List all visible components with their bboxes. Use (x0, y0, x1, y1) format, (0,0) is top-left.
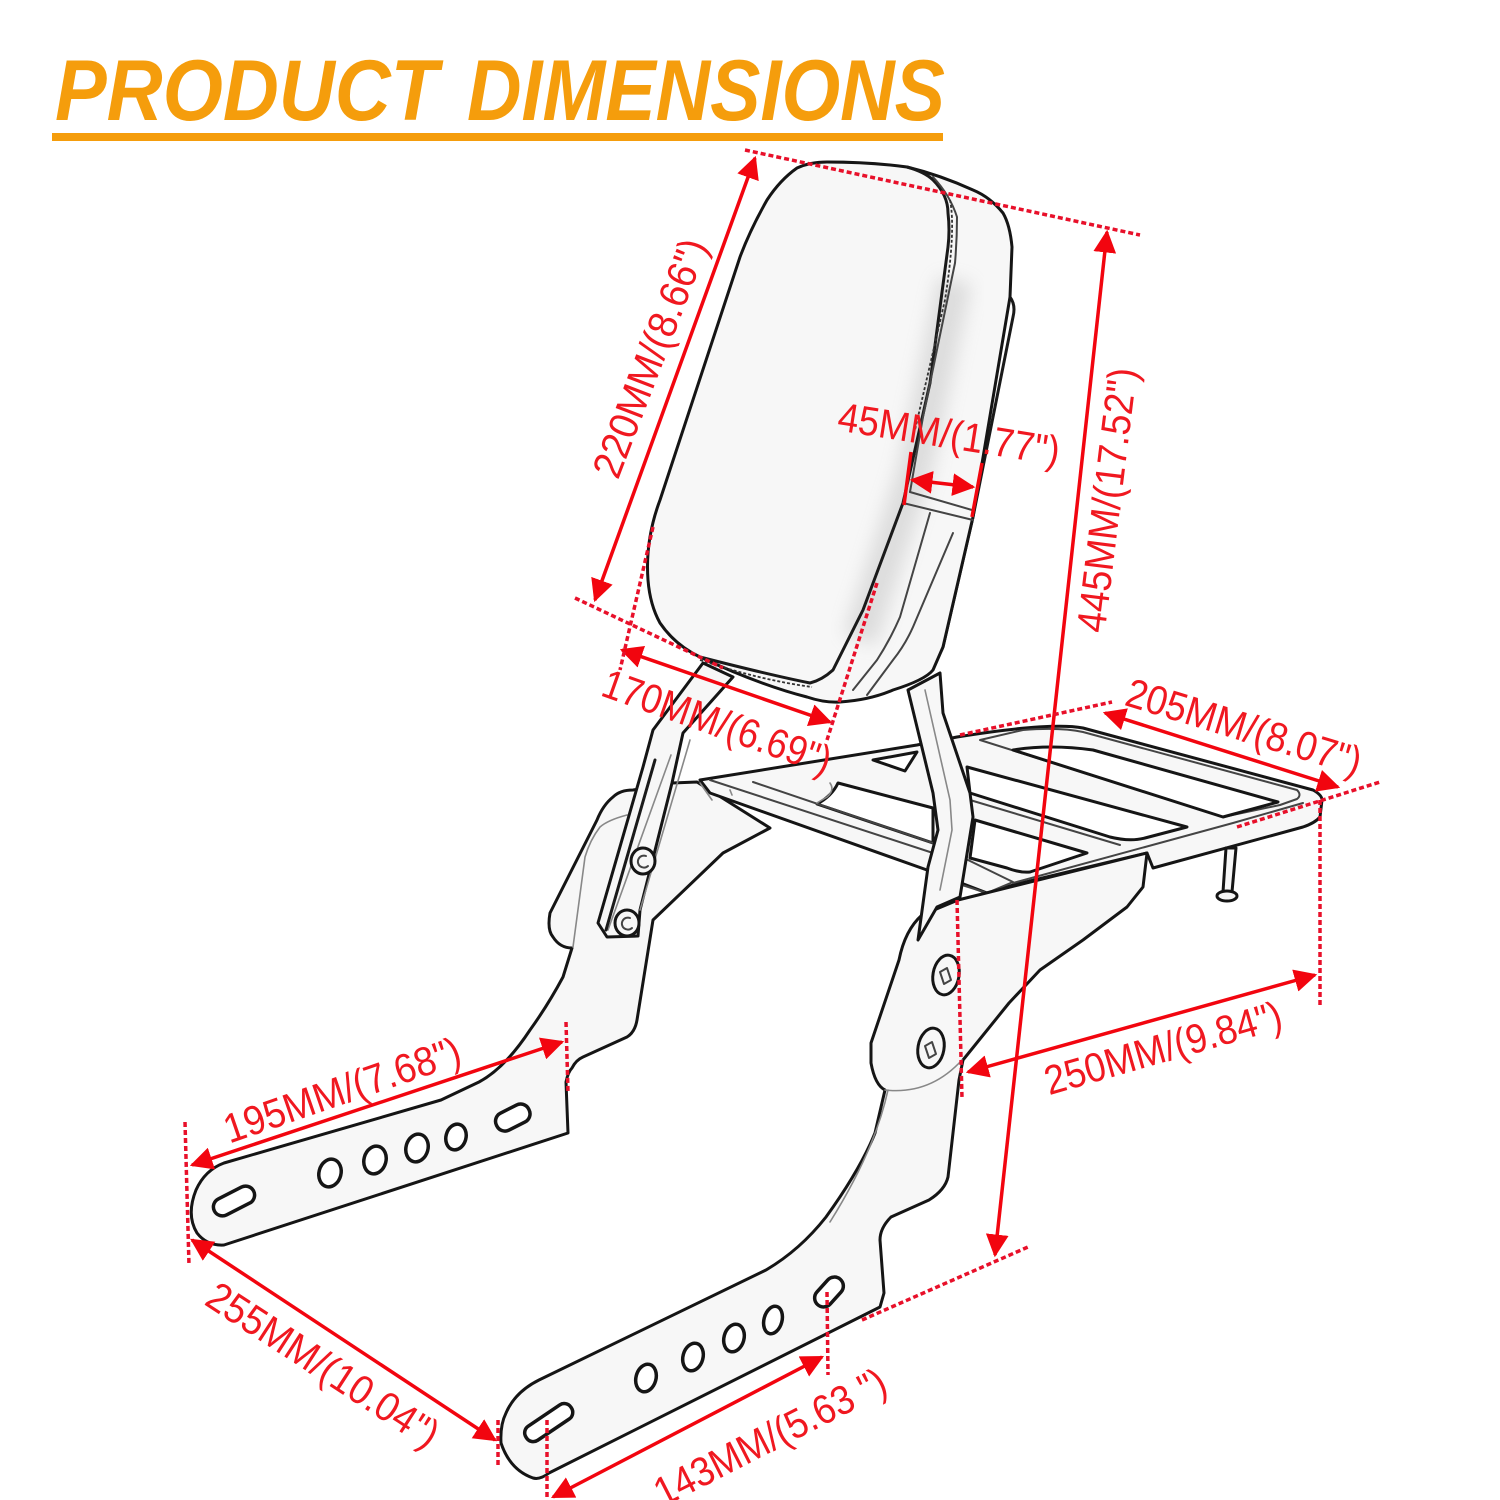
dimension: rack length 250MM: 250MM/(9.84") (1039, 992, 1287, 1104)
dimension: rack width 205MM: 205MM/(8.07") (1121, 669, 1367, 785)
dimension: rack width 205MM (960, 669, 1380, 827)
dimension: bracket length 195MM: 195MM/(7.68") (217, 1028, 467, 1152)
rack support post (1217, 848, 1237, 901)
dimension: pad height 220MM: 220MM/(8.66") (583, 232, 717, 484)
dimension: pad width 170MM (596, 527, 877, 784)
dimension: bracket spacing 255MM: 255MM/(10.04") (198, 1273, 448, 1457)
dimension: pad thickness 45MM (835, 394, 1063, 517)
right bracket mounting holes (522, 1273, 847, 1445)
hex nuts (615, 848, 655, 936)
dimension: pad thickness 45MM: 45MM/(1.77") (835, 394, 1063, 474)
right side bracket and plate (501, 853, 1147, 1478)
dimension: bracket length 195MM (185, 1022, 568, 1265)
left side bracket (191, 782, 770, 1245)
title: DIMENSIONS (467, 43, 945, 139)
left upright strut (598, 663, 733, 937)
title: PRODUCT (55, 43, 444, 139)
dimension: rack length 250MM (957, 800, 1320, 1104)
dimension: total height 445MM (862, 232, 1146, 1320)
dimension: hole spacing 143MM (547, 1292, 894, 1500)
dimension: pad width 170MM: 170MM/(6.69") (596, 660, 838, 784)
padded backrest (648, 162, 1014, 702)
title (52, 43, 945, 141)
left bracket mounting holes (210, 1101, 533, 1219)
seat shading (860, 280, 955, 640)
luggage rack (700, 726, 1322, 900)
product line drawing: sissy bar backrest with luggage rack (191, 162, 1322, 1478)
dimension: pad height 220MM (575, 150, 1140, 668)
right upright strut (908, 673, 973, 940)
dimension: total height 445MM: 445MM/(17.52") (1068, 365, 1146, 635)
right bracket bolts (915, 953, 962, 1070)
backrest strap (903, 492, 973, 520)
